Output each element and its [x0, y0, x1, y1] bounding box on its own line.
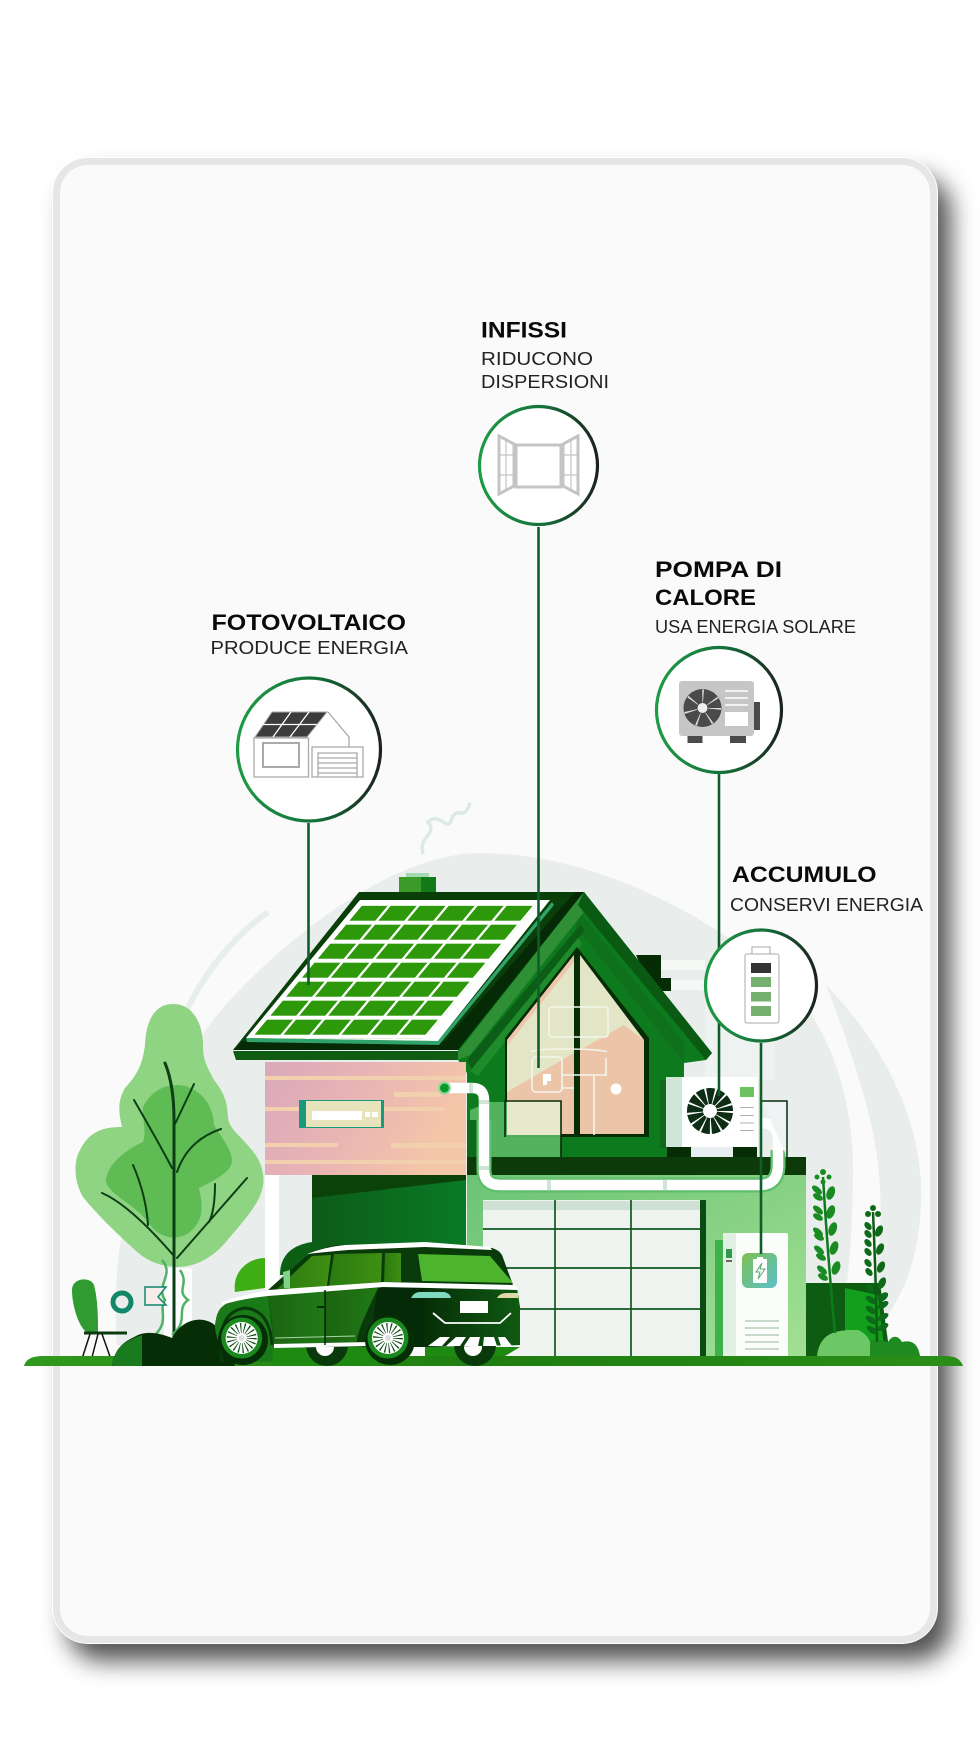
battery storage unit: [715, 1233, 788, 1366]
gable window: [505, 947, 649, 1137]
left bushes: [112, 1320, 235, 1366]
callout: accumulo: ACCUMULO: [732, 862, 876, 887]
roof: [233, 892, 584, 1060]
house: [233, 873, 806, 1366]
doors: [268, 1290, 325, 1345]
chair: [72, 1279, 127, 1365]
heat pump outdoor unit: [660, 1077, 787, 1157]
icon: house with solar panels: [254, 712, 363, 777]
callout: fotovoltaico: [210, 610, 409, 821]
ground: [24, 1356, 963, 1366]
callout: infissi: RIDUCONO: [481, 348, 593, 369]
callout: pompa di calore: [655, 557, 856, 772]
icon: window: [499, 436, 578, 494]
icon: battery: [745, 947, 779, 1023]
ring and box: [113, 1287, 166, 1311]
callout: pompa di calore: USA ENERGIA SOLARE: [655, 616, 856, 637]
windows: [276, 1255, 331, 1290]
band and lower wall: [467, 1120, 806, 1357]
lamps, plate, stripes: [460, 1301, 488, 1313]
solar panel on roof: [246, 900, 554, 1045]
side bush behind car: [235, 1258, 265, 1292]
right plants and bushes: [806, 1169, 920, 1356]
car: [215, 1242, 520, 1366]
background dome: [116, 853, 921, 1345]
smoke: [422, 803, 470, 854]
small framed glazing: [470, 1101, 561, 1157]
callout: pompa di calore: POMPA DI: [655, 557, 782, 582]
pink wall: [265, 1062, 466, 1175]
pipe: [439, 1082, 778, 1190]
rear quarter: [372, 1286, 426, 1347]
gable: [458, 892, 712, 1157]
front wheels: [218, 1315, 415, 1365]
garage door: [483, 1200, 706, 1357]
garden squiggles: [155, 1260, 188, 1335]
tailgate: [424, 1286, 520, 1347]
background card: [53, 158, 937, 1643]
chimney: [399, 873, 436, 892]
roof bulge behind car: [280, 1242, 312, 1275]
callout: infissi: DISPERSIONI: [481, 371, 609, 392]
tree: [75, 1004, 264, 1345]
callout: fotovoltaico: FOTOVOLTAICO: [212, 610, 406, 635]
callout: accumulo: [706, 862, 924, 1041]
front fender: [215, 1294, 274, 1362]
callout: accumulo: CONSERVI ENERGIA: [730, 894, 924, 915]
body: [215, 1243, 520, 1362]
connector lines: [308, 527, 761, 1254]
icon: heat pump: [679, 681, 760, 743]
callout: fotovoltaico: PRODUCE ENERGIA: [210, 637, 409, 658]
carport: [312, 1175, 466, 1265]
callout: infissi: [480, 318, 609, 524]
wall air conditioner: [299, 1100, 384, 1128]
rear vent and pipes: [636, 955, 775, 1080]
callout: infissi: INFISSI: [481, 318, 567, 342]
rear wheels peeking below body: [272, 1324, 520, 1366]
white trim: [307, 1242, 492, 1254]
callout: pompa di calore: CALORE: [655, 585, 756, 610]
